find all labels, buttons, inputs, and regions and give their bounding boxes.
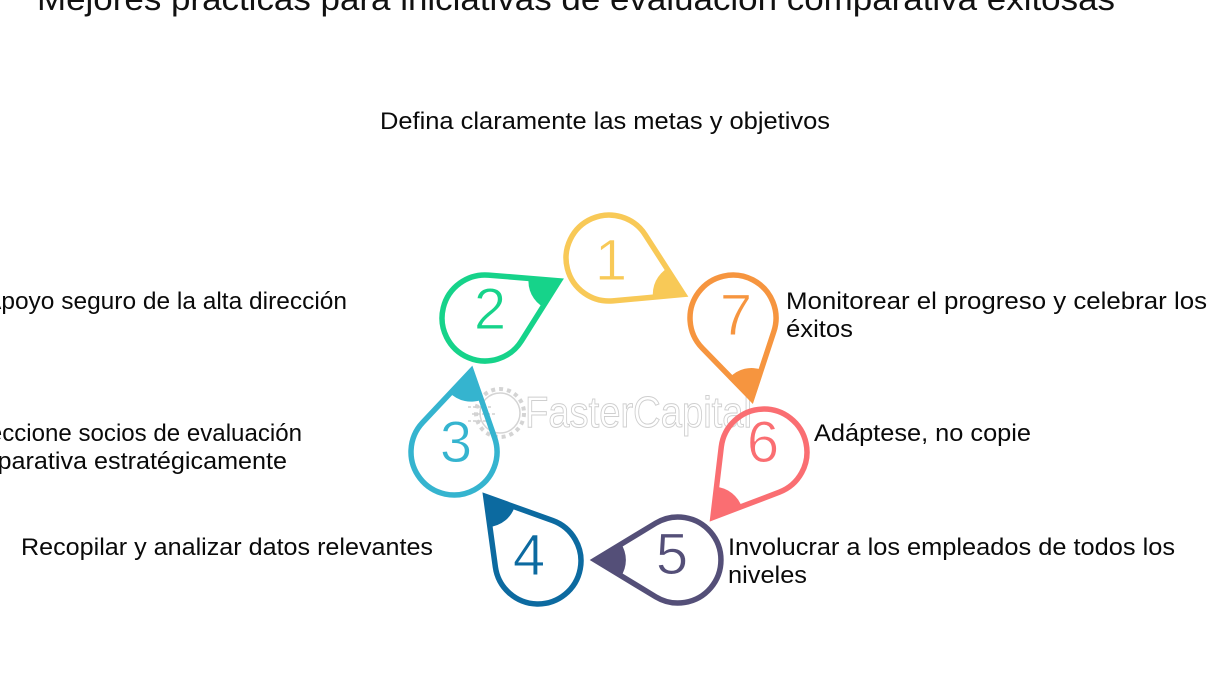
- label: step 5: Involucrar a los empleados de todos los: [728, 534, 1175, 561]
- label: step 7: Monitorear el progreso y celebrar los: [786, 288, 1207, 315]
- step 6 pin: 6: [747, 410, 779, 475]
- label: step 4: Recopilar y analizar datos relevantes: [21, 534, 433, 561]
- label: step 6: Adáptese, no copie: [814, 420, 1031, 447]
- step 4 pin: 4: [513, 523, 545, 588]
- step 5 pin: 5: [656, 522, 688, 587]
- step 1 pin: 1: [595, 228, 627, 293]
- step 7 pin: 7: [720, 283, 752, 348]
- step 5 pin: [592, 517, 721, 603]
- watermark: FasterCapital logo: FasterCapital: [525, 388, 752, 437]
- label: step 1: Defina claramente las metas y objetivos: [380, 108, 830, 135]
- label: step 7: [786, 288, 1207, 343]
- label: step 5: niveles: [728, 562, 807, 589]
- step 7 pin: [681, 266, 794, 411]
- step 3 pin: [403, 359, 514, 503]
- step 4 pin: [450, 467, 598, 621]
- step 2 pin: [427, 241, 581, 376]
- label: step 3: [0, 420, 302, 475]
- step 3 pin: 3: [440, 410, 472, 475]
- step 2 pin: 2: [474, 277, 506, 342]
- label: step 5: [728, 534, 1175, 589]
- step 6 pin: [677, 392, 824, 546]
- step 1 pin: [552, 201, 705, 334]
- label: step 7: éxitos: [786, 316, 853, 343]
